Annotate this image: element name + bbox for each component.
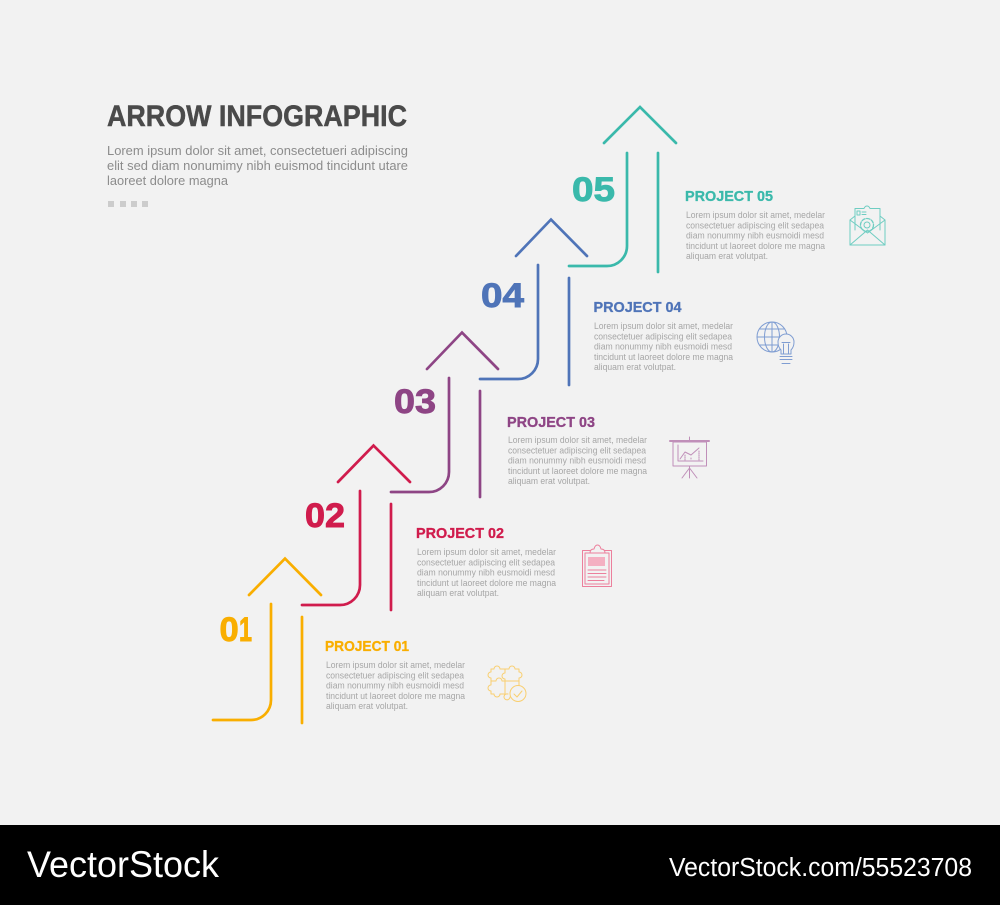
heading project 02: PROJECT 02	[416, 526, 504, 542]
icon: presentation board	[670, 437, 709, 478]
body text project 01: diam nonummy nibh eusmoidi mesd	[326, 680, 464, 690]
body text project 04	[594, 321, 733, 372]
intro text block: Lorem ipsum dolor sit amet, consectetueri adipiscing	[107, 144, 408, 158]
body text project 01	[326, 660, 465, 711]
heading project 05: PROJECT 05	[685, 189, 773, 205]
intro text block: elit sed diam nonumimy nibh euismod tincidunt utare	[107, 159, 408, 173]
number 04: 04	[481, 277, 524, 315]
title: ARROW INFOGRAPHIC	[107, 100, 407, 133]
heading project 03: PROJECT 03	[507, 415, 595, 431]
intro text block: laoreet dolore magna	[107, 174, 228, 188]
step 01 yellow arrow	[213, 558, 321, 723]
body text project 01: tincidunt ut laoreet dolore me magna	[326, 691, 465, 701]
decorative dots	[108, 201, 148, 207]
number 02: 02	[305, 497, 345, 535]
body text project 05	[686, 210, 825, 261]
body text project 03: consectetuer adipiscing elit sedapea	[508, 445, 646, 455]
number 03: 03	[394, 383, 436, 421]
body text project 03: aliquam erat volutpat.	[508, 476, 590, 486]
heading project 01: PROJECT 01	[325, 639, 409, 655]
body text project 05: diam nonummy nibh eusmoidi mesd	[686, 230, 824, 240]
number 05: 05	[572, 171, 615, 209]
body text project 01: Lorem ipsum dolor sit amet, medelar	[326, 660, 465, 670]
intro text block	[107, 144, 408, 188]
body text project 02: aliquam erat volutpat.	[417, 588, 499, 598]
body text project 04: consectetuer adipiscing elit sedapea	[594, 331, 732, 341]
step 03 purple arrow	[391, 332, 498, 497]
footer bar	[0, 825, 1000, 905]
step 05 teal arrow	[569, 107, 676, 272]
body text project 04: Lorem ipsum dolor sit amet, medelar	[594, 321, 733, 331]
step 04 blue arrow	[480, 220, 587, 385]
body text project 03: diam nonummy nibh eusmoidi mesd	[508, 456, 646, 466]
number 01: 1	[239, 611, 252, 649]
body text project 05: consectetuer adipiscing elit sedapea	[686, 220, 824, 230]
icon: globe and light bulb	[757, 322, 794, 364]
heading project 04: PROJECT 04	[594, 300, 682, 316]
step 02 red arrow	[302, 446, 410, 610]
body text project 03: Lorem ipsum dolor sit amet, medelar	[508, 435, 647, 445]
body text project 03: tincidunt ut laoreet dolore me magna	[508, 466, 647, 476]
body text project 02: diam nonummy nibh eusmoidi mesd	[417, 568, 555, 578]
body text project 04: tincidunt ut laoreet dolore me magna	[594, 352, 733, 362]
body text project 01: aliquam erat volutpat.	[326, 701, 408, 711]
footer brand: VectorStock	[27, 843, 219, 885]
body text project 04: aliquam erat volutpat.	[594, 362, 676, 372]
icon: envelope with gear	[850, 206, 885, 245]
body text project 03	[508, 435, 647, 486]
icon: puzzle with check	[488, 666, 526, 702]
body text project 01: consectetuer adipiscing elit sedapea	[326, 670, 464, 680]
footer url: VectorStock.com/55523708	[669, 854, 972, 882]
body text project 02: Lorem ipsum dolor sit amet, medelar	[417, 547, 556, 557]
body text project 04: diam nonummy nibh eusmoidi mesd	[594, 342, 732, 352]
body text project 05: aliquam erat volutpat.	[686, 251, 768, 261]
body text project 05: Lorem ipsum dolor sit amet, medelar	[686, 210, 825, 220]
body text project 02	[417, 547, 556, 598]
body text project 02: tincidunt ut laoreet dolore me magna	[417, 578, 556, 588]
number 01	[220, 611, 252, 649]
number 01: 0	[220, 611, 239, 649]
body text project 05: tincidunt ut laoreet dolore me magna	[686, 241, 825, 251]
icon: clipboard	[582, 545, 612, 586]
body text project 02: consectetuer adipiscing elit sedapea	[417, 557, 555, 567]
